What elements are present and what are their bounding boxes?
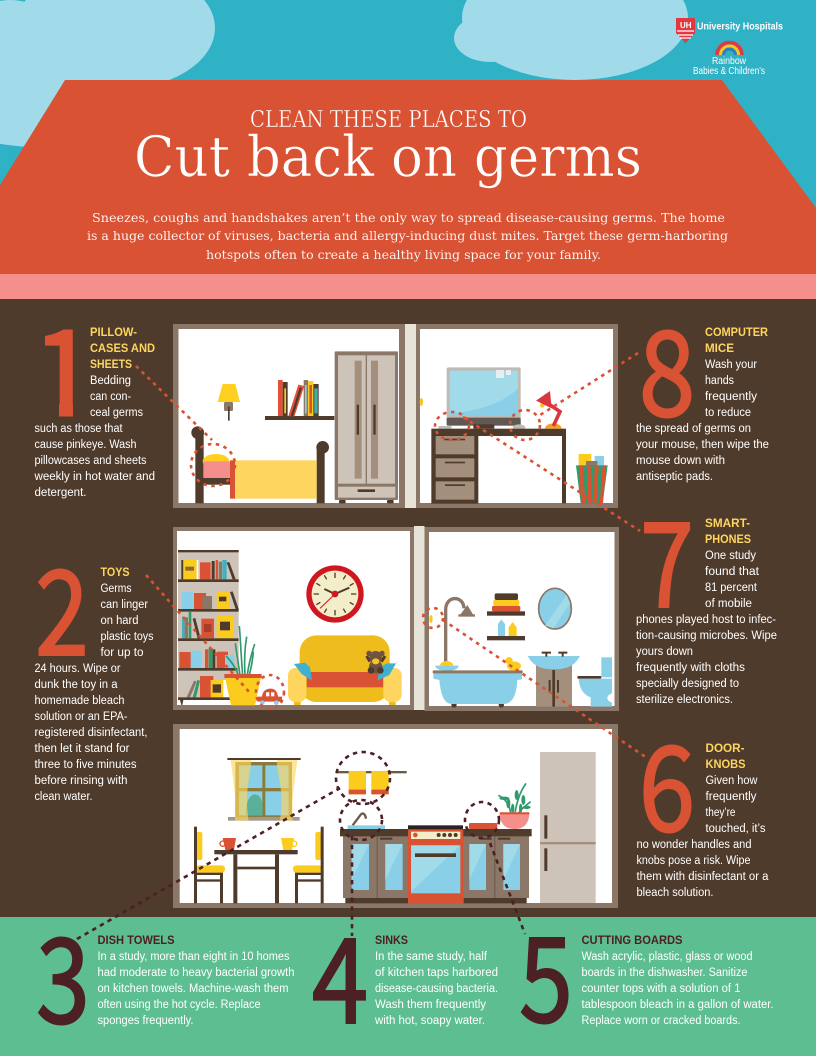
- icon: bathroom sink: [528, 652, 580, 707]
- heading: COMPUTER: [705, 325, 768, 339]
- body: the spread of germs on: [636, 423, 751, 435]
- panel: bedroom and study: [173, 324, 618, 508]
- body: hands: [705, 375, 734, 387]
- number 3: 3: [36, 887, 90, 1056]
- body: 24 hours. Wipe or: [34, 663, 121, 675]
- body: they’re: [706, 807, 736, 819]
- kitchen frame: [173, 724, 618, 908]
- number 5: 5: [519, 886, 573, 1056]
- body: In the same study, half: [375, 951, 488, 963]
- body: Bedding: [90, 375, 131, 387]
- icon: window with curtains: [227, 758, 301, 821]
- heading: SINKS: [375, 933, 408, 947]
- callout 1 pillow: [136, 366, 235, 486]
- icon: herb pot: [498, 783, 531, 829]
- text: item 6 door knobs: [636, 694, 769, 899]
- body: plastic toys: [100, 631, 154, 643]
- body: three to five minutes: [34, 759, 137, 771]
- dotted callout lines: upper rooms: [136, 353, 647, 758]
- body: sterilize electronics.: [636, 694, 733, 706]
- body: can linger: [100, 599, 148, 611]
- body: solution or an EPA-: [34, 711, 128, 723]
- body: on kitchen towels. Machine-wash them: [98, 983, 288, 995]
- intro paragraph: [87, 210, 728, 262]
- clouds: [0, 0, 688, 147]
- icon: kitchen counter and cabinets: [340, 829, 532, 903]
- icon: wall lamp: [218, 384, 240, 421]
- body: weekly in hot water and: [33, 471, 155, 483]
- text: item 7 smartphones: [636, 471, 777, 706]
- text: item 1 pillowcases: [34, 328, 155, 498]
- icon: shower: [446, 599, 475, 672]
- body: disease-causing bacteria.: [375, 983, 498, 995]
- number 4: 4: [312, 886, 368, 1056]
- body: tion-causing microbes. Wipe: [636, 630, 777, 642]
- icon: waste bin: [576, 454, 608, 503]
- body: of kitchen taps harbored: [375, 967, 498, 979]
- logo: Rainbow Babies & Children's: Rainbow: [712, 56, 747, 67]
- body: phones played host to infec-: [636, 614, 776, 626]
- icon: teddy bear: [366, 651, 385, 674]
- body: [98, 951, 294, 1027]
- study furniture: [420, 367, 608, 504]
- body: pillowcases and sheets: [34, 455, 147, 467]
- main title: Cut back on germs: [134, 125, 642, 190]
- icon: sink faucet: [348, 813, 385, 829]
- icon: dining table and cups: [214, 838, 298, 903]
- body: [636, 775, 769, 899]
- body: One study: [705, 550, 756, 562]
- body: sponges frequently.: [98, 1015, 194, 1027]
- body: [582, 951, 774, 1027]
- callout 5 cutting board: [465, 802, 525, 934]
- heading: KNOBS: [706, 757, 746, 771]
- number 2: 2: [35, 519, 89, 690]
- icon: bookshelf: [265, 380, 334, 420]
- icon: wall clock: [306, 565, 364, 623]
- heading: DISH TOWELS: [98, 933, 174, 947]
- icon: right chair: [293, 827, 324, 903]
- icon: left chair: [194, 827, 225, 903]
- body: Germs: [100, 583, 132, 595]
- text: item 4 sinks: [312, 886, 498, 1056]
- number 7: 7: [640, 471, 694, 642]
- body: before rinsing with: [34, 775, 128, 787]
- body: specially designed to: [636, 678, 739, 690]
- body: In a study, more than eight in 10 homes: [98, 951, 290, 963]
- body: tablespoon bleach in a gallon of water.: [582, 999, 774, 1011]
- green footer band: [0, 917, 816, 1056]
- body: had moderate to heavy bacterial growth: [98, 967, 294, 979]
- logo: University Hospitals: University Hospitals: [697, 20, 783, 32]
- body: no wonder handles and: [636, 839, 752, 851]
- body: them with disinfectant or a: [636, 871, 769, 883]
- body: antiseptic pads.: [636, 471, 713, 483]
- body: frequently: [705, 391, 757, 403]
- title kicker: CLEAN THESE PLACES TO: [250, 105, 527, 133]
- heading: [705, 516, 751, 546]
- heading: TOYS: [100, 565, 130, 579]
- kitchen furniture: [194, 752, 596, 903]
- body: bleach solution.: [636, 887, 714, 899]
- body: Replace worn or cracked boards.: [582, 1015, 740, 1027]
- heading: PHONES: [705, 532, 751, 546]
- body: registered disinfectant,: [34, 727, 148, 739]
- icon: toilet: [577, 657, 612, 707]
- callout 7 smartphone: [435, 412, 640, 531]
- living room and bathroom frame: [173, 526, 619, 711]
- dotted callout lines: kitchen: [77, 752, 525, 939]
- bathroom furniture: [429, 588, 612, 708]
- body: counter tops with a solution of 1: [582, 983, 740, 995]
- body: [34, 583, 154, 803]
- number 1: 1: [33, 280, 95, 450]
- body: boards in the dishwasher. Sanitize: [582, 967, 748, 979]
- body: such as those that: [34, 423, 123, 435]
- sky background: [0, 0, 816, 300]
- callout 3 dish towels: [77, 752, 390, 939]
- icon: desk: [431, 429, 566, 504]
- heading: PILLOW-: [90, 325, 137, 339]
- icon: sofa: [288, 635, 402, 705]
- icon: oval mirror: [539, 588, 571, 629]
- heading: SHEETS: [90, 357, 132, 371]
- icon: computer monitor: [438, 367, 525, 430]
- body: to reduce: [705, 407, 751, 419]
- heading: CUTTING BOARDS: [582, 933, 682, 947]
- icon: bookcase: [178, 550, 239, 705]
- brown house wall: [0, 299, 816, 917]
- body: with hot, soapy water.: [374, 1015, 485, 1027]
- body: of mobile: [705, 598, 752, 610]
- icon: dish towels: [336, 771, 407, 794]
- logo: Rainbow Babies & Children's: [693, 43, 765, 77]
- body: touched, it’s: [706, 823, 766, 835]
- callout 6 door knob: [423, 608, 647, 758]
- pink band: [0, 274, 816, 299]
- intro paragraph: is a huge collector of viruses, bacteria and allergy-inducing dust mites. Target these germ-harboring: [87, 228, 728, 243]
- heading: SMART-: [705, 516, 750, 530]
- body: ceal germs: [90, 407, 143, 419]
- intro paragraph: Sneezes, coughs and handshakes aren’t the only way to spread disease-causing germs. The home: [92, 210, 725, 225]
- heading: MICE: [705, 341, 734, 355]
- logo: University Hospitals: UH: [680, 21, 692, 30]
- heading: [705, 325, 768, 355]
- body: homemade bleach: [34, 695, 124, 707]
- body: yours down: [636, 646, 693, 658]
- heading: DOOR-: [706, 741, 744, 755]
- body: Given how: [706, 775, 758, 787]
- body: frequently with cloths: [636, 662, 745, 674]
- icon: door knob: [420, 398, 423, 406]
- panel: kitchen: [173, 724, 618, 908]
- logo: Rainbow Babies & Children's: Babies & Children’s: [693, 66, 765, 77]
- body: frequently: [706, 791, 757, 803]
- heading: [90, 325, 155, 371]
- icon: bed: [191, 426, 329, 503]
- body: mouse down with: [636, 455, 725, 467]
- body: detergent.: [34, 487, 86, 499]
- body: then let it stand for: [34, 743, 130, 755]
- callout 4 sink: [340, 800, 382, 936]
- body: Wash them frequently: [375, 999, 486, 1011]
- body: [636, 359, 769, 483]
- body: Wash acrylic, plastic, glass or wood: [582, 951, 752, 963]
- body: your mouse, then wipe the: [636, 439, 769, 451]
- bedroom furniture: [191, 351, 398, 503]
- icon: towel shelves: [487, 593, 525, 640]
- number 8: 8: [639, 279, 695, 450]
- body: cause pinkeye. Wash: [34, 439, 136, 451]
- body: found that: [705, 566, 760, 578]
- heading: CASES AND: [90, 341, 155, 355]
- icon: refrigerator: [540, 752, 596, 903]
- body: dunk the toy in a: [34, 679, 118, 691]
- body: [636, 550, 777, 706]
- body: on hard: [100, 615, 138, 627]
- body: knobs pose a risk. Wipe: [636, 855, 750, 867]
- panel: living room and bathroom: [173, 526, 619, 711]
- body: [374, 951, 498, 1027]
- intro paragraph: hotspots often to create a healthy living space for your family.: [206, 247, 601, 262]
- body: [33, 375, 155, 499]
- body: clean water.: [34, 791, 92, 803]
- roof with title: [0, 80, 816, 274]
- text: item 5 cutting boards: [519, 886, 774, 1056]
- logo: University Hospitals: [676, 18, 783, 43]
- text: item 8 computer mice: [636, 279, 769, 483]
- text: item 2 toys: [34, 519, 154, 803]
- heading: [706, 741, 746, 771]
- icon: potted plant: [224, 626, 262, 705]
- icon: rubber duck: [503, 657, 521, 671]
- icon: oven: [408, 825, 463, 903]
- icon: bathroom door knob: [429, 615, 433, 623]
- body: 81 percent: [705, 582, 758, 594]
- icon: cutting board: [469, 823, 497, 829]
- icon: desk lamp: [536, 391, 562, 429]
- body: for up to: [100, 647, 144, 659]
- icon: bathtub: [433, 661, 523, 708]
- icon: toy car: [257, 689, 282, 705]
- body: often using the hot cycle. Replace: [98, 999, 260, 1011]
- body: can con-: [90, 391, 131, 403]
- icon: wardrobe: [335, 351, 398, 503]
- number 6: 6: [639, 694, 695, 865]
- body: Wash your: [705, 359, 757, 371]
- callout 2 toy car: [146, 575, 284, 709]
- living room furniture: [178, 550, 402, 705]
- callout 8 mouse: [510, 353, 638, 440]
- text: item 3 dish towels: [36, 887, 295, 1056]
- bedroom and study frame: [173, 324, 618, 508]
